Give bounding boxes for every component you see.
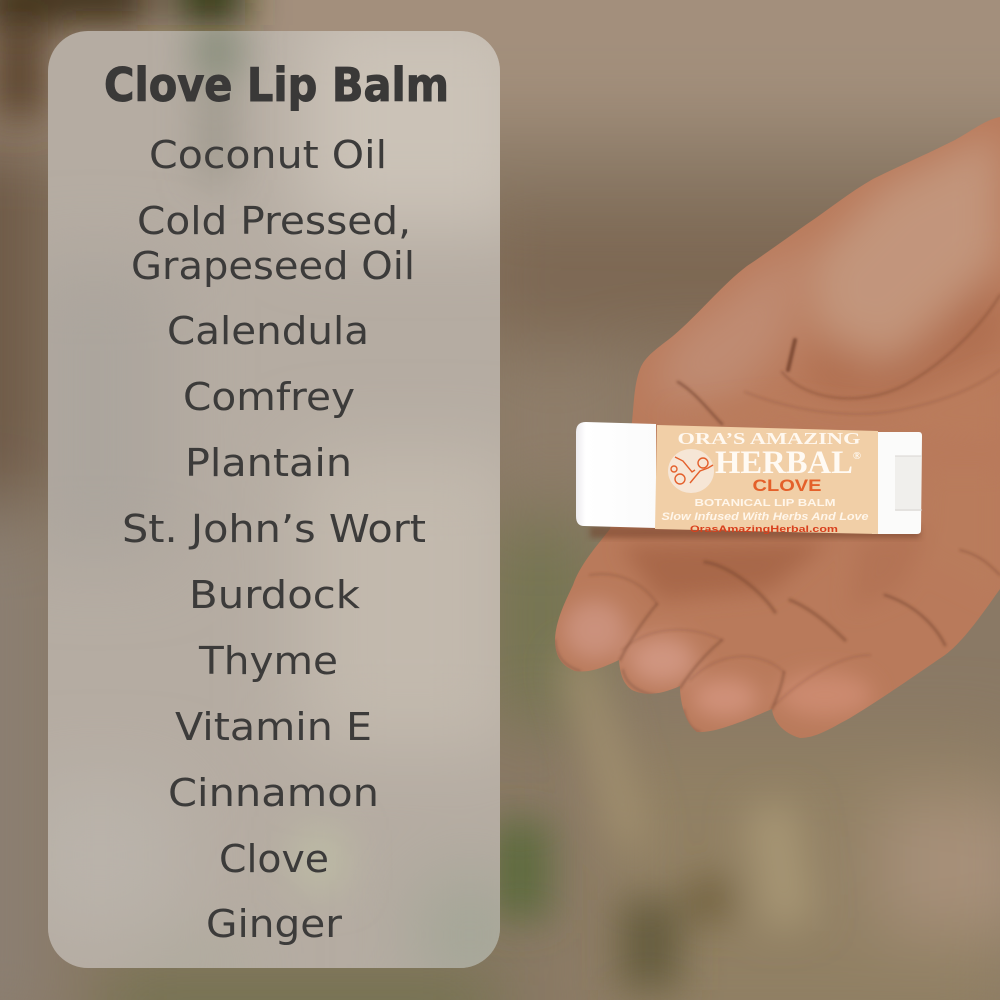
ingredient: grapeseed oil bbox=[131, 199, 415, 288]
tube cap bbox=[576, 422, 656, 528]
ingredient: comfrey: Comfrey bbox=[183, 375, 355, 419]
panel title: Clove Lip Balm bbox=[104, 58, 449, 112]
ingredient: ginger: Ginger bbox=[206, 902, 342, 946]
product label bbox=[655, 425, 878, 535]
ingredient: grapeseed oil: Grapeseed Oil bbox=[131, 244, 415, 288]
finger creases bbox=[555, 295, 1000, 732]
ingredient: calendula: Calendula bbox=[167, 309, 369, 353]
hand silhouette bbox=[555, 117, 1000, 738]
icon: hand holding the lip balm bbox=[555, 117, 1000, 738]
label brand: ORA’S AMAZING bbox=[678, 429, 860, 448]
ingredient: clove: Clove bbox=[219, 837, 329, 881]
ingredient: st john's wort: St. John’s Wort bbox=[122, 507, 426, 551]
label logo bbox=[668, 449, 714, 493]
label herbal: ® bbox=[853, 450, 861, 462]
ingredient: thyme: Thyme bbox=[198, 639, 338, 683]
ingredient list bbox=[122, 133, 426, 946]
panel: ingredients list bbox=[48, 31, 500, 968]
ingredient: vitamin e: Vitamin E bbox=[175, 705, 372, 749]
ingredient: grapeseed oil: Cold Pressed, bbox=[137, 199, 411, 243]
label url: OrasAmazingHerbal.com bbox=[690, 524, 838, 535]
tube shadow bbox=[590, 526, 920, 538]
ingredient: plantain: Plantain bbox=[185, 441, 352, 485]
ingredient: coconut oil: Coconut Oil bbox=[149, 133, 387, 177]
label descriptor: BOTANICAL LIP BALM bbox=[694, 498, 836, 509]
label herbal: HERBAL bbox=[715, 445, 854, 481]
label flavor: CLOVE bbox=[752, 476, 822, 495]
lip balm tube bbox=[576, 422, 922, 538]
label tagline: Slow Infused With Herbs And Love bbox=[662, 511, 868, 523]
ingredient: burdock: Burdock bbox=[189, 573, 360, 617]
ingredient: cinnamon: Cinnamon bbox=[168, 771, 379, 815]
tube right base bbox=[872, 432, 922, 534]
frosted panel background bbox=[48, 31, 500, 968]
